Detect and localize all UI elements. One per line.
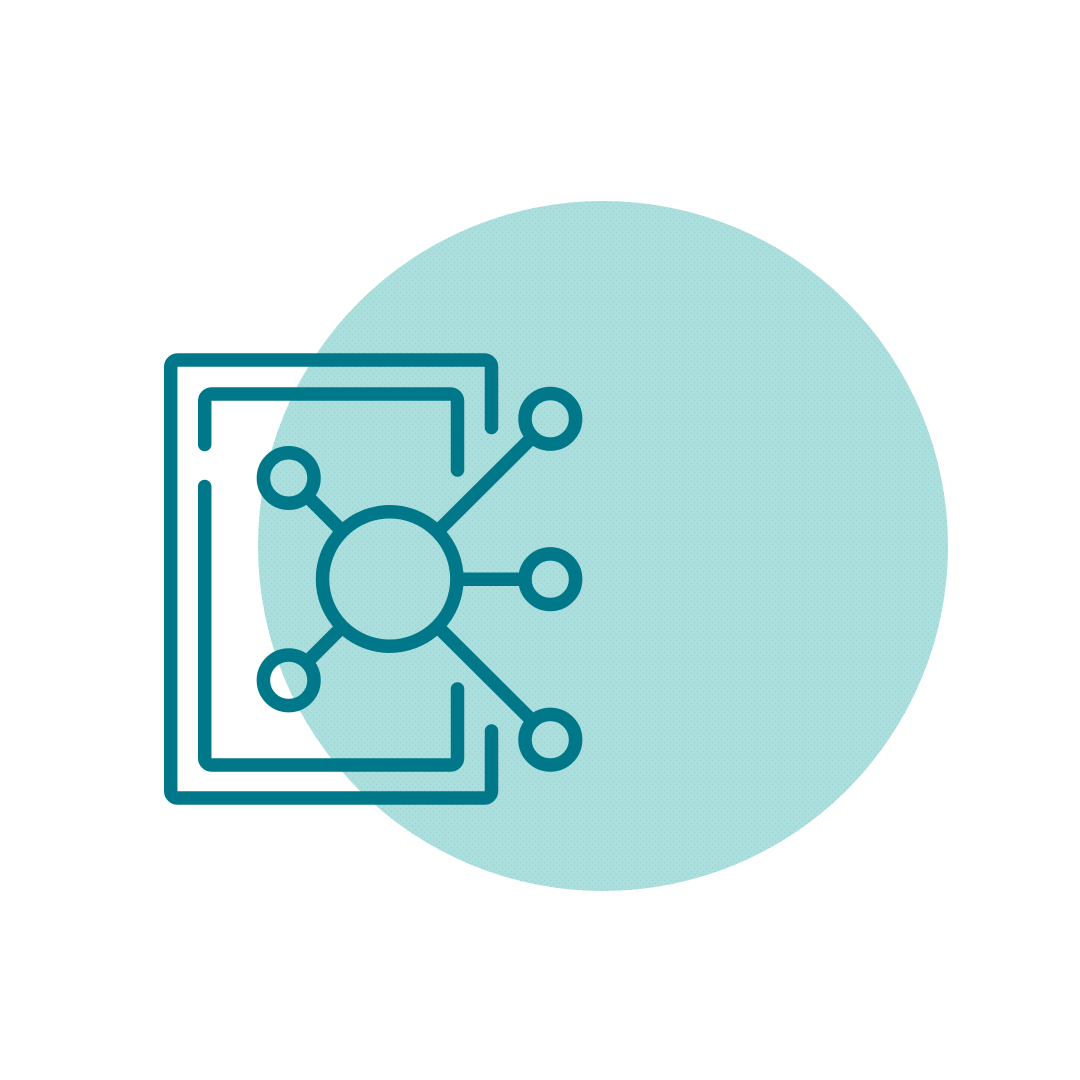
central node <box>322 512 457 646</box>
bottom-right node <box>525 714 576 765</box>
outer frame <box>171 360 491 798</box>
connector lines <box>308 436 533 722</box>
inner frame <box>205 394 458 765</box>
background circle <box>258 201 948 891</box>
icon: network in document frame <box>171 360 576 798</box>
bottom-left node <box>263 655 314 706</box>
top-left node <box>263 453 314 503</box>
top-right node <box>525 394 576 444</box>
middle-right node <box>525 554 576 604</box>
